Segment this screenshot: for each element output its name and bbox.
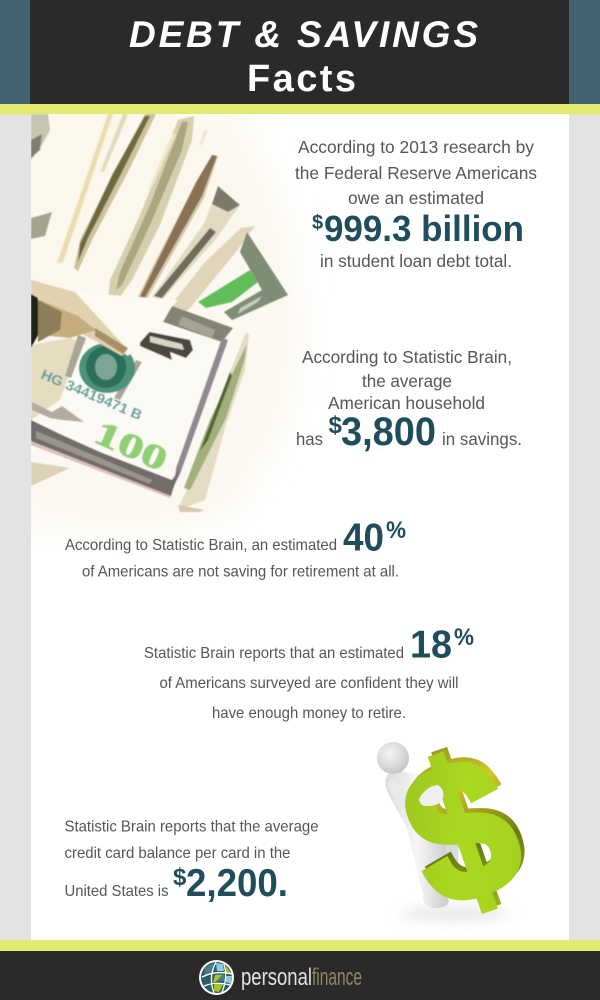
image: stack of hundred dollar bills	[20, 105, 305, 535]
footer band	[0, 940, 600, 1000]
fact: credit card balance	[64, 818, 319, 905]
title: Facts	[247, 58, 356, 100]
dollar sign: $	[384, 709, 547, 945]
fact: confident to retire	[144, 624, 474, 722]
fact: household savings: the average	[362, 371, 452, 391]
fact: household savings: American household	[328, 393, 485, 413]
figure hand	[419, 785, 443, 806]
fact: student loan debt: in student loan debt total.	[320, 251, 512, 271]
fact: not saving for retirement: 40	[343, 516, 384, 560]
fact: confident to retire: 18	[410, 624, 452, 666]
figure	[377, 742, 462, 908]
fact: confident to retire: have enough money to retire.	[212, 705, 406, 722]
logo: personal finance: finance	[312, 964, 362, 991]
fact: not saving for retirement	[65, 516, 406, 580]
fact: not saving for retirement: %	[386, 517, 406, 544]
logo: personal finance: personal	[241, 964, 312, 991]
fact: not saving for retirement: According to Statistic Brain, an estimated	[65, 537, 337, 554]
green 100: 100	[89, 414, 173, 479]
fact: student loan debt: the Federal Reserve Americans	[295, 163, 537, 183]
fact: student loan debt: 999.3 billion	[324, 208, 524, 249]
fact: household savings: 3,800	[341, 410, 436, 454]
fact: confident to retire: of Americans surveyed are confident they will	[160, 675, 458, 692]
serial number: HG 34419471 B	[39, 366, 144, 423]
fact: household savings: $	[328, 412, 342, 439]
fact: credit card balance: $	[173, 864, 187, 891]
white content panel	[31, 114, 569, 940]
fact: household savings	[296, 347, 522, 454]
globe icon	[199, 960, 234, 995]
fact: credit card balance: Statistic Brain reports that the average	[64, 818, 319, 836]
main bill	[31, 304, 233, 498]
fact: student loan debt: $	[312, 212, 323, 234]
header banner	[0, 0, 600, 114]
top bill tip	[107, 294, 178, 356]
fact: student loan debt: According to 2013 research by	[298, 137, 534, 157]
fact: credit card balance: United States is	[64, 883, 169, 900]
fact: household savings: in savings.	[442, 429, 522, 449]
fact: not saving for retirement: of Americans are not saving for retirement at all.	[82, 564, 399, 580]
title: DEBT & SAVINGS	[129, 14, 478, 55]
dollar sign: $	[380, 713, 544, 950]
fact: student loan debt	[295, 137, 537, 271]
logo: personal finance	[199, 960, 362, 995]
title	[129, 14, 478, 100]
fact: household savings: According to Statistic Brain,	[302, 347, 512, 367]
fact: credit card balance: 2,200.	[186, 862, 288, 905]
fact: confident to retire: %	[454, 624, 474, 651]
fact: student loan debt: owe an estimated	[348, 188, 484, 208]
fact: household savings: has	[296, 429, 323, 449]
icon: figure pushing green dollar sign	[377, 709, 547, 950]
fact: confident to retire: Statistic Brain reports that an estimated	[144, 645, 404, 662]
fact: credit card balance: credit card balance per card in the	[64, 845, 291, 862]
